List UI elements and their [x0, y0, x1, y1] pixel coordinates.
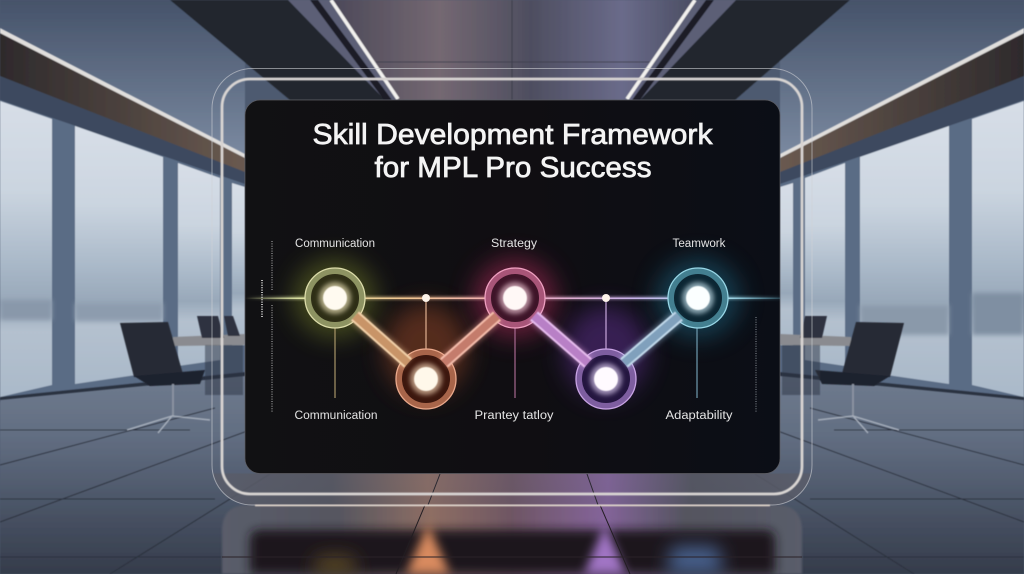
title: for MPL Pro Success — [374, 152, 652, 184]
labels bottom row: Adaptability — [666, 410, 733, 422]
title — [312, 119, 713, 184]
labels bottom row — [294, 410, 733, 422]
labels top row: Strategy — [491, 238, 537, 250]
labels top row: Communication — [295, 238, 375, 250]
right window wall — [780, 28, 1024, 402]
node: teamwork — [668, 268, 728, 328]
vertical stem lines — [335, 298, 697, 398]
labels top row: Teamwork — [672, 238, 726, 250]
floor — [0, 376, 1024, 574]
ambient glows — [293, 258, 740, 398]
title: Skill Development Framework — [312, 119, 713, 151]
node: prantey tatloy — [576, 349, 636, 409]
left window wall — [0, 28, 245, 402]
labels bottom row: Communication — [294, 410, 378, 422]
node: communication bottom — [396, 349, 456, 409]
dotted scale marks — [262, 241, 756, 413]
node: communication top — [305, 268, 365, 328]
panel: dark framework board — [245, 100, 780, 474]
right chair and table — [780, 316, 904, 433]
labels bottom row: Prantey tatloy — [474, 410, 554, 422]
junction dots — [422, 294, 610, 302]
glass frame band — [212, 68, 812, 506]
labels top row — [295, 238, 726, 250]
diagonal connectors — [355, 316, 679, 363]
node: strategy — [485, 268, 545, 328]
panel floor reflection — [222, 505, 802, 574]
inner glass frame — [222, 79, 802, 494]
outer glass frame — [212, 68, 812, 505]
ceiling — [0, 0, 1024, 157]
horizontal connector line — [245, 296, 780, 300]
left chair and table — [120, 316, 245, 433]
